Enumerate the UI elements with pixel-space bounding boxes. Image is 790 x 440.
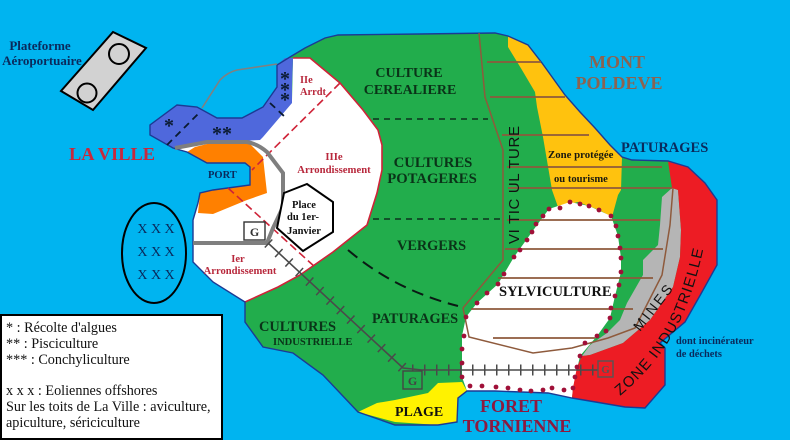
label: Pâturages centre: PATURAGES: [372, 311, 458, 327]
forestry white zone: [462, 202, 621, 398]
label: 3rd arrondissement: IIIe: [325, 151, 343, 163]
black dashed aquaculture dividers: [167, 103, 285, 145]
port orange zone: [187, 144, 267, 214]
hand-drawn label: Zone industrielle: ZONE INDUSTRIELLE: [614, 248, 703, 396]
Place du 1er-Janvier hexagon: [277, 184, 333, 251]
hand-drawn label: Viticulture: VI TIC UL TURE: [506, 126, 523, 244]
black dashed crop boundaries: [348, 119, 503, 306]
label: Sylviculture: SYLVICULTURE: [499, 284, 612, 300]
legend box: apiculture, sériciculture: [6, 415, 140, 431]
aquaculture asterisks: *: [280, 89, 290, 111]
label: 2nd arrondissement: Arrdt: [300, 87, 327, 98]
aquaculture asterisks: [164, 68, 290, 145]
label: Pâturages east: PATURAGES: [621, 140, 708, 156]
thin grey breakwater: [202, 64, 277, 108]
railway line: [268, 243, 600, 370]
city: white arrondissements: [175, 58, 382, 302]
label: Cultures potagères: POTAGERES: [387, 171, 477, 187]
aquaculture asterisks: *: [280, 79, 290, 101]
label: Mont Poldeve: POLDEVE: [575, 73, 663, 93]
label: Forêt Tornienne: TORNIENNE: [463, 416, 571, 436]
aquaculture asterisks: **: [212, 123, 232, 145]
label: incinérateur: dont incinérateur: [676, 336, 754, 347]
coastline outline: [150, 33, 717, 425]
hand-drawn label: Mines: MINES: [630, 281, 676, 334]
Place du 1er-Janvier hexagon: du 1er-: [287, 212, 319, 223]
legend box: x x x : Eoliennes offshores: [6, 383, 158, 399]
brown terrace lines: [471, 62, 672, 338]
label: Vergers: VERGERS: [397, 238, 466, 254]
legend box: [1, 315, 222, 439]
airport label: Plateforme: [9, 38, 71, 53]
station G: industrial zone: [598, 361, 613, 377]
Place du 1er-Janvier hexagon: Place: [292, 200, 316, 211]
island base: green farmland: [150, 33, 717, 425]
label: Cultures industrielle: INDUSTRIELLE: [273, 337, 352, 348]
station G: city: [244, 222, 265, 240]
station G: city: G: [250, 225, 259, 239]
label: Zone protégée: Zone protégée: [548, 149, 614, 161]
wind farm ellipse: X X X: [137, 268, 175, 283]
wind farm ellipse: X X X: [137, 245, 175, 260]
label: Mont Poldeve: MONT: [589, 52, 645, 72]
forest boundary dots: [460, 200, 623, 393]
label: Port: PORT: [208, 170, 237, 181]
aquaculture asterisks: *: [280, 68, 290, 90]
station G: south: [403, 371, 422, 389]
label: 3rd arrondissement: Arrondissement: [297, 164, 371, 176]
legend box: *** : Conchyliculture: [6, 352, 130, 368]
label: 1st arrondissement: Ier: [231, 254, 245, 265]
label: Zone protégée: ou tourisme: [554, 174, 608, 185]
city boundary in red: [245, 58, 382, 302]
label: Cultures industrielle: CULTURES: [259, 319, 336, 335]
label: Forêt Tornienne: FORET: [480, 396, 542, 416]
viticulture brown boundary: [463, 33, 673, 353]
label: 1st arrondissement: Arrondissement: [204, 266, 277, 277]
red dashed arrondissement boundaries: [228, 83, 340, 267]
legend box: Sur les toits de La Ville : aviculture,: [6, 399, 211, 415]
station G: industrial zone: G: [601, 364, 610, 376]
protected zone in gold: [508, 36, 622, 217]
aquaculture blue zone: [150, 58, 293, 148]
thick grey road around port: [175, 142, 283, 243]
mines grey strip: [582, 188, 681, 356]
label: Culture céréalière: CEREALIERE: [364, 83, 456, 98]
station G: south: G: [408, 374, 417, 388]
wind farm ellipse: X X X: [137, 222, 175, 237]
legend box: ** : Pisciculture: [6, 336, 98, 352]
legend box: * : Récolte d'algues: [6, 320, 117, 336]
Place du 1er-Janvier hexagon: Janvier: [287, 226, 321, 237]
wind farm ellipse: [122, 203, 186, 303]
airport label: Aéroportuaire: [2, 53, 82, 68]
label: Culture céréalière: CULTURE: [375, 66, 443, 81]
label: La Ville: LA VILLE: [69, 144, 155, 164]
label: Plage: PLAGE: [395, 405, 443, 420]
beach in yellow: [358, 382, 467, 425]
label: incinérateur: de déchets: [676, 349, 722, 360]
label: Cultures potagères: CULTURES: [394, 155, 472, 171]
airport platform: [61, 32, 146, 110]
industrial zone in red: [572, 161, 717, 408]
aquaculture asterisks: *: [164, 115, 174, 137]
label: 2nd arrondissement: IIe: [300, 75, 313, 86]
